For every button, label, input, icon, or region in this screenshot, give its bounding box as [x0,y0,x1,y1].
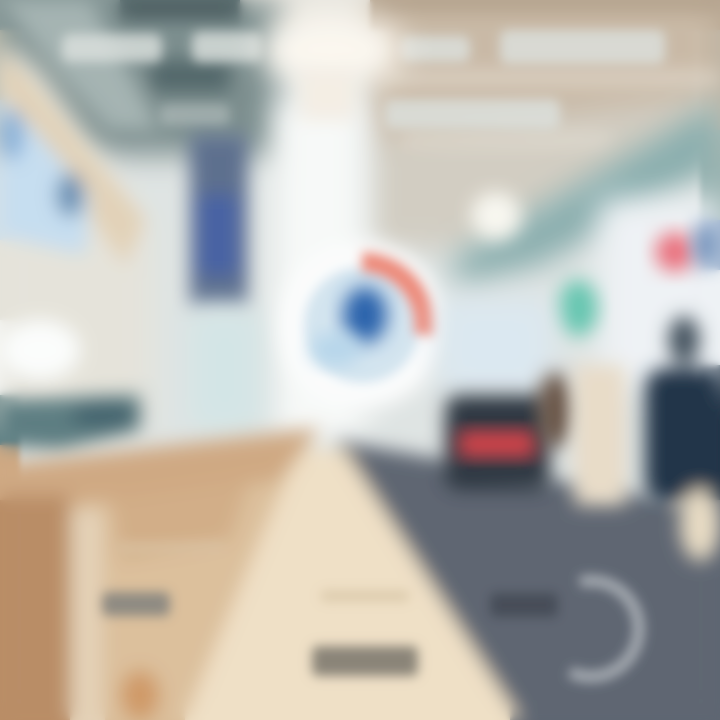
icon: floor ring [570,581,639,677]
labels: blurred floor text [102,542,558,676]
floor: wood counter, cream aisle and dark floor [0,428,720,720]
pillar and lamp [190,14,404,440]
chart: donut [278,241,446,409]
panel: left wall and screen [0,40,150,450]
banner: blue hanging sign [190,135,248,305]
panel: right teal band and lights [440,100,720,390]
ceiling [0,0,720,250]
object: red and dark display unit [445,372,573,490]
heading: blurred title [62,30,665,129]
column: cream post [575,365,625,505]
figure: dark person [645,316,720,561]
